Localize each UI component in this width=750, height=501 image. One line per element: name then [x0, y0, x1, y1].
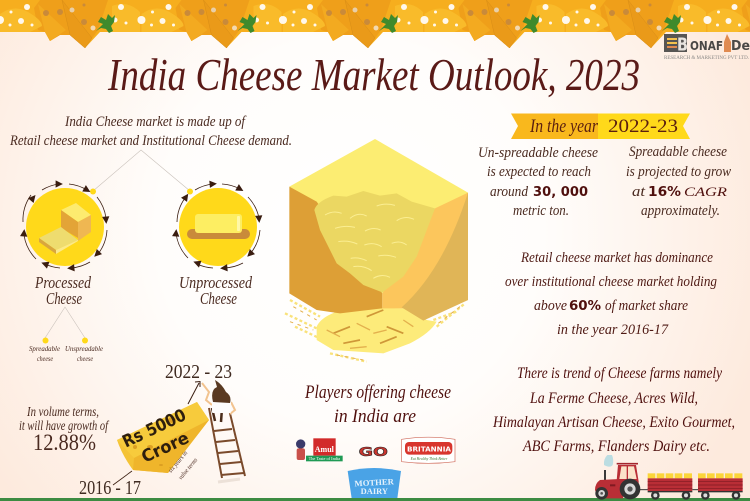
- panel: unprocessed cheese: [173, 181, 262, 271]
- logo: britannia: Eat Healthy Think Better: [410, 456, 448, 461]
- spreadable stat: approximately.: [641, 203, 720, 219]
- rotated note: value terms: [177, 457, 199, 481]
- spreadable stat: is projected to grow: [626, 164, 731, 180]
- players heading: [304, 382, 451, 427]
- spreadable stat: [626, 144, 731, 219]
- icon: tractor with trailers: [595, 455, 743, 500]
- year ribbon: 2022-23: [608, 116, 678, 137]
- cheese farms text: ABC Farms, Flanders Dairy etc.: [522, 438, 710, 455]
- label: processed cheese: Cheese: [46, 289, 82, 308]
- wedge value text: Rs 5000: [119, 405, 190, 452]
- volume growth stat: In volume terms,: [26, 404, 99, 419]
- label: unprocessed cheese: Cheese: [200, 289, 237, 308]
- rotated note: [167, 450, 199, 481]
- retail share text: over institutional cheese market holding: [505, 274, 717, 290]
- cheese right face: [382, 193, 468, 320]
- logo: mother dairy: [348, 468, 401, 498]
- bottom ground line: [0, 498, 750, 501]
- smoke: [604, 455, 613, 467]
- tractor: [595, 464, 640, 500]
- company logo: B: [677, 34, 688, 56]
- retail share text: in the year 2016-17: [557, 322, 669, 338]
- intro text: India Cheese market is made up of: [64, 114, 247, 130]
- ring arrows: unprocessed: [173, 181, 262, 271]
- retail share text: [505, 250, 717, 338]
- wedge value text: [119, 405, 192, 468]
- cheese wedge: [117, 402, 209, 473]
- retail share text: 60%: [569, 299, 601, 314]
- trailer one: [640, 473, 692, 500]
- grated face: [314, 191, 435, 292]
- retail share text: of market share: [605, 298, 688, 314]
- company logo: [664, 34, 750, 61]
- label: unprocessed cheese: Unprocessed: [179, 273, 252, 292]
- rotated note: six years in: [167, 450, 189, 474]
- company logo: RESEARCH & MARKETING PVT LTD.: [664, 56, 749, 61]
- logo: amul: [296, 438, 343, 461]
- cheese farms text: [492, 365, 735, 455]
- year ribbon: In the year: [529, 116, 598, 137]
- icon: cheese block: [39, 203, 91, 254]
- unspreadable sub-type: cheese: [77, 354, 94, 363]
- unspreadable sub-type: [65, 338, 104, 363]
- volume growth stat: it will have growth of: [19, 418, 110, 433]
- label: unprocessed cheese: [179, 273, 252, 308]
- arrow from base: [113, 471, 132, 485]
- crumbs scatter: [285, 300, 465, 362]
- cheese farms text: There is trend of Cheese farms namely: [517, 365, 722, 382]
- un-spreadable stat: around: [490, 184, 528, 200]
- logo: go: GO: [359, 444, 388, 459]
- company logo: ONAF: [690, 39, 723, 53]
- logo: amul: Amul: [315, 445, 335, 454]
- logo: mother dairy: MOTHER: [354, 477, 395, 488]
- spreadable stat: at: [632, 184, 646, 200]
- players heading: Players offering cheese: [304, 382, 451, 403]
- spreadable stat: 16%: [648, 185, 681, 200]
- retail share text: Retail cheese market has dominance: [520, 250, 713, 266]
- brand logos: [296, 437, 455, 498]
- retail share text: above: [534, 298, 567, 314]
- unspreadable sub-type: Unspreadable: [65, 344, 104, 353]
- right face shade: [402, 193, 468, 321]
- panel: processed cheese: [21, 181, 109, 271]
- players heading: in India are: [334, 406, 416, 427]
- central cheese illustration: [285, 139, 468, 362]
- icon: butter on board: [187, 214, 250, 239]
- spreadable sub-type: cheese: [37, 354, 54, 363]
- wedge value text: Crore: [139, 428, 192, 468]
- year label 2016-17: 2016 - 17: [79, 477, 141, 499]
- trailer two: [692, 473, 743, 500]
- spreadable sub-type: [29, 338, 61, 363]
- un-spreadable stat: metric ton.: [513, 203, 569, 219]
- icon: man on ladder: [202, 380, 245, 482]
- label: processed cheese: [34, 273, 91, 308]
- title: India Cheese Market Outlook, 2023: [107, 49, 640, 100]
- un-spreadable stat: is expected to reach: [487, 164, 591, 180]
- ring arrows: processed: [21, 181, 109, 271]
- spreadable stat: CAGR: [684, 184, 727, 199]
- intro text: Retail cheese market and Institutional Cheese demand.: [9, 133, 292, 149]
- value growth chart: cheese wedge: [79, 361, 232, 499]
- un-spreadable stat: Un-spreadable cheese: [478, 145, 598, 161]
- label: processed cheese: Processed: [34, 273, 91, 292]
- logo: mother dairy: DAIRY: [361, 487, 388, 496]
- cheese top face: [289, 139, 468, 293]
- logo: britannia: BRITANNIA: [407, 445, 452, 453]
- spreadable stat: Spreadable cheese: [629, 144, 727, 160]
- cheese farms text: La Ferme Cheese, Acres Wild,: [529, 390, 698, 407]
- cheese left face: [289, 187, 382, 313]
- logo: amul: The Taste of India: [309, 456, 340, 461]
- volume growth stat: [19, 404, 110, 455]
- volume growth stat: 12.88%: [33, 430, 96, 455]
- spreadable sub-type: Spreadable: [29, 344, 61, 353]
- intro text: [9, 114, 292, 149]
- year ribbon: [511, 114, 690, 139]
- arrow up: [188, 382, 200, 404]
- un-spreadable stat: 30, 000: [533, 185, 588, 200]
- logo: britannia: [402, 437, 455, 463]
- un-spreadable stat: [478, 145, 598, 219]
- connector lines to cheese types: [45, 150, 190, 338]
- year label 2022-23: 2022 - 23: [165, 361, 232, 383]
- cheese border: [0, 0, 750, 48]
